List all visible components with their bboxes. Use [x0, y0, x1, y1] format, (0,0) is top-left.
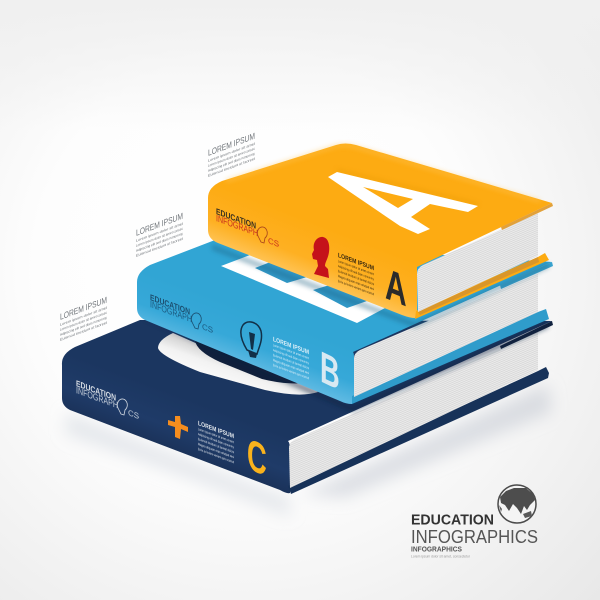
page block — [354, 274, 538, 397]
cutout shadow for letter A — [337, 170, 478, 204]
bottom cover flap — [352, 309, 549, 404]
icon: head silhouette — [312, 237, 329, 278]
label: C callout: LOREM IPSUM — [60, 295, 107, 322]
cutout letter A on cover — [328, 172, 478, 234]
cutout hole upper — [255, 261, 307, 283]
spine text block — [273, 336, 309, 380]
spine label: education infographics: INFOGRAPH — [216, 213, 258, 239]
cover and spine — [62, 320, 552, 493]
spine text block: LOREM IPSUM — [198, 420, 234, 440]
logo text: education infographics: INFOGRAPHICS — [411, 544, 462, 554]
icon: globe — [498, 485, 536, 523]
label: B callout: LOREM IPSUM — [136, 211, 183, 238]
bottom cover flap — [415, 253, 549, 319]
spine text block: Euismod tincidunt ut laoreet dolore — [273, 353, 309, 370]
spine label: education infographics: CS — [268, 236, 280, 249]
spine text block: Enim ad minim veniam quis nostrud — [273, 363, 309, 380]
bottom cover flap — [288, 367, 549, 494]
label: B callout: Euismod tincidunt ut laoreet — [136, 237, 183, 258]
logo text: education infographics: INFOGRAPHICS — [411, 526, 538, 547]
label: C callout: Euismod tincidunt ut laoreet — [60, 321, 107, 342]
spine text block: Euismod tincidunt ut laoreet dolore — [338, 269, 374, 286]
icon: plus — [168, 416, 188, 439]
cutout hole lower — [313, 284, 367, 308]
label: B callout: Lorem ipsum dolor sit amet consec — [136, 227, 183, 248]
spine text block: Euismod tincidunt ut laoreet dolore — [198, 437, 234, 454]
spine text block: Enim ad minim veniam quis nostrud — [338, 279, 374, 296]
spine text block: Enim ad minim veniam quis nostrud — [198, 447, 234, 464]
spine text block: Magna aliquam erat volutpat wisi — [338, 274, 374, 291]
spine text block: LOREM IPSUM — [273, 336, 309, 356]
label: C callout: Adipiscing elit sed diam nonummy — [60, 316, 107, 337]
spine text block: Magna aliquam erat volutpat wisi — [273, 358, 309, 375]
label: C callout — [60, 295, 107, 342]
label: A callout: LOREM IPSUM — [208, 131, 255, 158]
spine text block: Adipiscing elit sed diam nonummy — [338, 264, 374, 281]
letter A: A — [385, 259, 407, 317]
letter C: C — [247, 428, 267, 486]
spine text block: Adipiscing elit sed diam nonummy — [198, 432, 234, 449]
spine text block — [198, 420, 234, 464]
spine label: education infographics: EDUCATION — [76, 378, 116, 403]
spine label: education infographics: CS — [128, 408, 140, 421]
logo text: education infographics: EDUCATION — [411, 512, 494, 528]
spine label: education infographics: INFOGRAPH — [150, 299, 192, 325]
spine text block: Adipiscing elit sed diam nonummy — [273, 348, 309, 365]
spine text block: Magna aliquam erat volutpat wisi — [198, 442, 234, 459]
label: A callout: Euismod tincidunt ut laoreet — [208, 157, 255, 178]
spine label: education infographics: INFOGRAPH — [76, 385, 118, 411]
cutout letter C on cover — [158, 333, 318, 395]
spine text block — [338, 252, 374, 296]
icon: light bulb — [241, 322, 262, 358]
shadow under orange book — [212, 244, 549, 328]
cover and spine — [208, 144, 552, 318]
spine text block: Lorem ipsum dolor sit amet consec — [338, 259, 374, 276]
top cover flap — [501, 203, 553, 230]
label: A callout: Lorem ipsum dolor sit amet consec — [208, 147, 255, 168]
spine label: education infographics — [76, 378, 140, 421]
spine text block: LOREM IPSUM — [338, 252, 374, 272]
label: A callout — [208, 131, 255, 178]
spine text block: Lorem ipsum dolor sit amet consec — [273, 343, 309, 360]
book A: orange — [208, 144, 553, 328]
spine label: education infographics — [150, 292, 214, 335]
label: C callout: Lorem ipsum dolor sit amet consec — [60, 311, 107, 332]
page block — [289, 332, 538, 488]
spine label: education infographics: CS — [202, 322, 214, 335]
cutout letter B on cover — [221, 255, 400, 323]
label: A callout: Lorem ipsum dolor sit amet — [208, 142, 255, 163]
label: A callout: Adipiscing elit sed diam nonummy — [208, 152, 255, 173]
book B: blue — [137, 240, 553, 412]
label: B callout — [136, 211, 183, 258]
top cover flap — [500, 321, 553, 349]
spine label: education infographics: EDUCATION — [150, 292, 190, 317]
spine label: education infographics: EDUCATION — [216, 206, 256, 231]
label: B callout: Lorem ipsum dolor sit amet — [136, 222, 183, 243]
letter B: B — [320, 343, 340, 401]
ground shadow — [66, 384, 552, 516]
logo text: education infographics — [411, 512, 538, 558]
page block — [417, 213, 538, 312]
top cover flap — [500, 262, 553, 289]
book C: navy — [62, 320, 553, 494]
label: C callout: Lorem ipsum dolor sit amet — [60, 306, 107, 327]
spine label: education infographics — [216, 206, 280, 249]
label: B callout: Adipiscing elit sed diam nonummy — [136, 232, 183, 253]
shadow under blue book — [137, 316, 548, 412]
logo text: education infographics: Lorem ipsum dolor sit amet, consectetur — [411, 554, 471, 558]
back edge highlight — [226, 145, 540, 201]
spine text block: Lorem ipsum dolor sit amet consec — [198, 427, 234, 444]
cover and spine — [137, 240, 552, 404]
